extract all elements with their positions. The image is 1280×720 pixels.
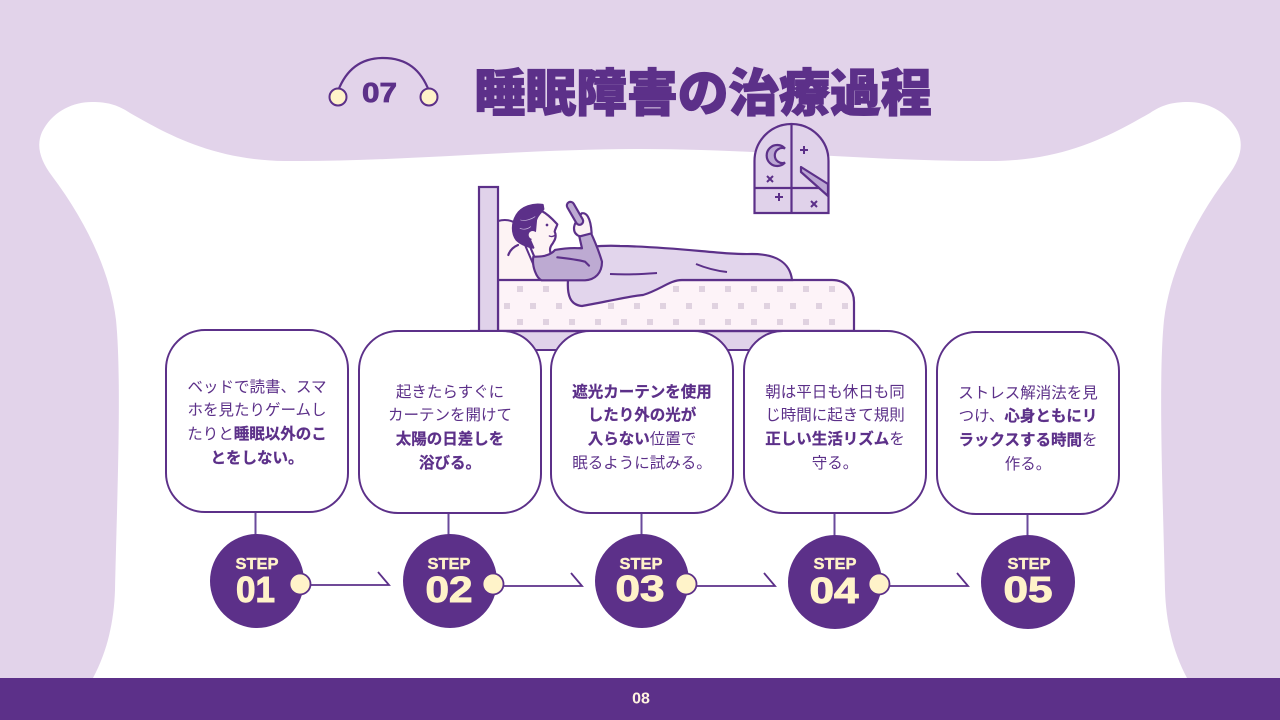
title: 睡眠障害の治療過程 [474, 65, 932, 122]
section number: 07 [362, 77, 397, 108]
card: step 4 text: じ時間に起きて規則 [765, 407, 905, 424]
hair highlight [520, 217, 535, 229]
illustration: person lying in bed [470, 187, 880, 350]
phone [565, 201, 585, 226]
arrow 04 to 05 [868, 573, 968, 594]
card: step 3 text: 眠るように試みる。 [572, 455, 712, 472]
hair [513, 205, 543, 248]
section number badge [330, 58, 438, 108]
step 04: 04 [810, 570, 858, 611]
card: step 3 text: したり外の光が [588, 407, 696, 424]
card: step 3 text: 入らない位置で [588, 431, 696, 448]
torso and arm [533, 232, 602, 280]
card: step 2 text: 浴びる。 [419, 455, 481, 472]
card: step 4 text: 朝は平日も休日も同 [765, 384, 905, 401]
step 01: 01 [236, 569, 275, 610]
card: step 1 text: ホを見たりゲームし [187, 402, 327, 419]
step 01 [210, 534, 304, 628]
moon [767, 145, 785, 166]
eye [546, 224, 548, 226]
card: step 1 text: ベッドで読書、スマ [187, 379, 327, 396]
step 05 [981, 535, 1075, 629]
footer bar [0, 678, 1280, 720]
arrow 02 to 03 [482, 573, 582, 594]
sleeve crease [557, 257, 589, 266]
step 04: STEP [814, 556, 856, 573]
smile [549, 234, 556, 236]
step 02 [403, 534, 497, 628]
step 01: STEP [236, 556, 278, 573]
step 02: STEP [428, 556, 470, 573]
headboard [479, 187, 498, 331]
arrow 01 to 02 [290, 572, 389, 594]
connector lines between cards and step circles [256, 512, 1028, 536]
card: step 2 text: 起きたらすぐに [396, 384, 504, 401]
badge arc [338, 58, 429, 91]
card: step 4 text [743, 330, 927, 514]
step 03: STEP [620, 556, 662, 573]
page number: 08 [632, 690, 650, 708]
card: step 3 text [550, 330, 734, 514]
card: step 5 text [936, 331, 1120, 515]
card: step 3 text: 遮光カーテンを使用 [572, 384, 712, 401]
card: step 1 text [165, 329, 349, 513]
mattress dots [504, 286, 848, 325]
right bead [420, 88, 438, 106]
blanket [568, 246, 792, 306]
arrow 03 to 04 [676, 573, 775, 594]
bed floor line [470, 330, 880, 332]
step 05: 05 [1004, 569, 1052, 610]
card: step 5 text: ラックスする時間を [958, 432, 1098, 449]
card: step 5 text: つけ、心身ともにリ [959, 408, 1097, 425]
hand [574, 213, 592, 236]
pillow [498, 220, 540, 280]
card: step 1 text: とをしない。 [210, 450, 304, 467]
bed base [490, 331, 800, 350]
card: step 1 text: たりと睡眠以外のこ [187, 426, 327, 443]
step 04 [788, 535, 882, 629]
pillow crease [508, 245, 518, 255]
card: step 4 text: 守る。 [812, 455, 858, 472]
card: step 4 text: 正しい生活リズムを [765, 431, 905, 448]
sparkles [767, 146, 817, 207]
person [508, 201, 602, 280]
step 02: 02 [426, 569, 472, 610]
card: step 2 text: カーテンを開けて [388, 407, 512, 424]
step 03: 03 [616, 568, 664, 609]
card: step 2 text: 太陽の日差しを [396, 431, 504, 448]
icon: night window [754, 124, 828, 213]
step 05: STEP [1008, 556, 1050, 573]
ear [529, 231, 537, 239]
white pillow-shaped background blob [39, 102, 1241, 678]
left bead [330, 88, 346, 106]
card: step 5 text: 作る。 [1005, 456, 1051, 473]
card: step 5 text: ストレス解消法を見 [958, 385, 1098, 402]
shooting star [801, 167, 828, 196]
face [528, 211, 557, 258]
blanket folds [610, 264, 727, 274]
step 03 [595, 534, 689, 628]
mattress [498, 280, 854, 331]
card: step 2 text [358, 330, 542, 514]
